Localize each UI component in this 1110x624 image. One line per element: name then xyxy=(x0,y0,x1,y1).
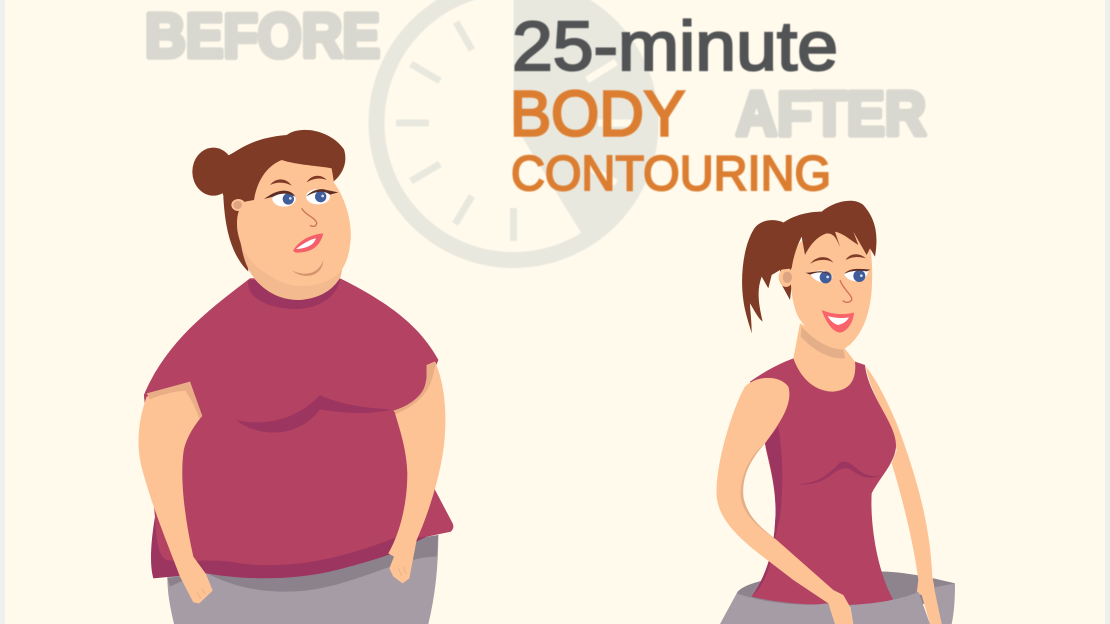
pants back rim xyxy=(737,571,955,610)
shirt xyxy=(144,278,453,578)
face features xyxy=(805,254,871,333)
hair: ponytail xyxy=(742,220,795,333)
title: CONTOURING xyxy=(511,147,831,201)
left arm xyxy=(717,378,853,624)
figure: before woman xyxy=(139,130,453,624)
figure: after woman xyxy=(717,201,955,624)
title: BODY xyxy=(510,78,685,150)
neck xyxy=(793,323,857,397)
right arm xyxy=(866,367,942,624)
skirt xyxy=(167,535,438,624)
left arm xyxy=(139,382,213,603)
before label: BEFORE xyxy=(145,2,380,71)
right arm xyxy=(388,362,445,583)
hair: fringe xyxy=(778,201,876,270)
clock graphic xyxy=(376,0,659,260)
pants front xyxy=(720,583,955,624)
after label: AFTER xyxy=(736,80,926,149)
head xyxy=(779,228,872,349)
hair xyxy=(192,130,345,272)
title xyxy=(510,7,838,201)
neck shadow xyxy=(801,327,845,358)
top xyxy=(750,358,896,605)
face features xyxy=(264,176,338,276)
head xyxy=(231,160,351,300)
title: 25-minute xyxy=(512,7,838,85)
